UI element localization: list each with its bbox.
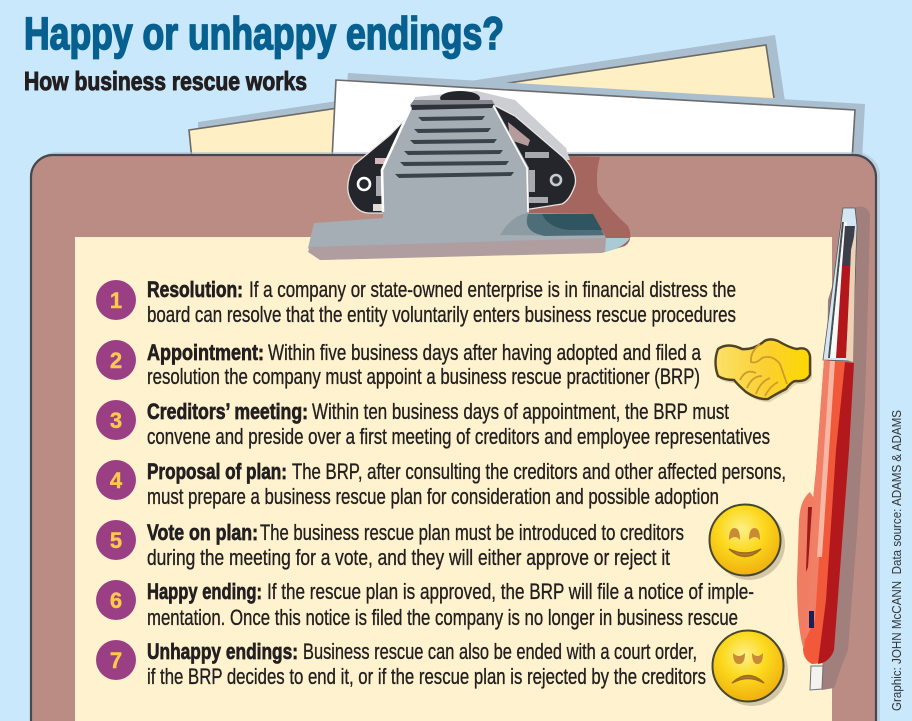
clip black ear left	[348, 112, 420, 213]
step 5	[96, 520, 684, 570]
clip front lip	[308, 238, 606, 260]
pen clip slot	[806, 507, 812, 572]
number badge 2	[96, 340, 136, 380]
icon: handshake	[716, 339, 812, 402]
number badge 7: 7	[110, 648, 122, 673]
number badge 6	[96, 580, 136, 620]
clip dark teal patch	[542, 214, 602, 230]
pen barrel dark side	[818, 362, 854, 664]
step 6 text: mentation. Once this notice is filed the company is no longer in business rescue	[147, 605, 738, 630]
pen tip dark line	[828, 222, 844, 358]
number badge 4	[96, 460, 136, 500]
credit line: Graphic: JOHN McCANN Data source: ADAMS & ADAMS	[889, 410, 904, 711]
number badge 2: 2	[110, 348, 122, 373]
step 6	[96, 579, 754, 630]
step 5 text: Vote on plan:	[147, 520, 258, 545]
pen barrel	[803, 360, 854, 664]
clip grey halo on sheet	[400, 91, 570, 160]
number badge 3	[96, 400, 136, 440]
paper clip	[308, 91, 630, 260]
step 5 text: The business rescue plan must be introduced to creditors	[260, 520, 684, 545]
step 1	[96, 277, 736, 327]
step 6 text: Happy ending:	[147, 579, 262, 604]
step 1 text: board can resolve that the entity voluntarily enters business rescue procedures	[147, 302, 736, 327]
clip top knob	[440, 91, 480, 105]
step 2 text	[147, 340, 702, 389]
step 2	[96, 340, 702, 389]
number badge 5: 5	[110, 528, 122, 553]
step 2 text: Appointment:	[147, 340, 264, 365]
cream paper on clipboard	[75, 237, 832, 721]
number badge 4: 4	[110, 468, 123, 493]
step 4 text	[147, 459, 786, 509]
pen tip red band	[836, 266, 851, 358]
pen tail end	[810, 666, 823, 690]
clip metal plate	[308, 100, 606, 260]
number badge 1	[96, 280, 136, 320]
step 2 text: Within five business days after having adopted and filed a	[268, 340, 702, 365]
number badge 1: 1	[110, 288, 122, 313]
clip plate right highlight	[493, 105, 528, 212]
step 4 text: must prepare a business rescue plan for consideration and possible adoption	[147, 484, 719, 509]
pen tip white stripe	[830, 222, 847, 358]
icon: smiling face	[710, 504, 785, 580]
step 1 text: Resolution:	[147, 277, 243, 302]
clip pivot right	[551, 175, 561, 185]
pen tip tan band	[846, 228, 856, 362]
clip black ear right	[480, 103, 576, 209]
number badge 3: 3	[110, 408, 122, 433]
step 7 text: if the BRP decides to end it, or if the rescue plan is rejected by the creditors	[147, 664, 706, 689]
step 4	[96, 459, 786, 509]
step 7 text: Business rescue can also be ended with a court order,	[303, 639, 697, 664]
step 7	[96, 639, 706, 689]
number badge 6: 6	[110, 588, 122, 613]
clip ridges	[395, 116, 514, 178]
yellow sheet behind clipboard	[189, 35, 786, 160]
pen barrel highlight	[817, 361, 835, 557]
pen chrome tip	[823, 208, 857, 361]
step 3 text: Creditors’ meeting:	[147, 399, 308, 424]
clip top dark bar	[411, 104, 494, 110]
pen shadow	[822, 207, 870, 690]
clip plate dark shadow patch	[527, 214, 604, 236]
pen button slot	[809, 611, 814, 628]
number badge 5	[96, 520, 136, 560]
step 1 text: If a company or state-owned enterprise is in financial distress the	[249, 277, 736, 302]
clip spring details	[373, 122, 549, 211]
pen	[797, 207, 870, 690]
step 7 text	[147, 639, 706, 689]
subtitle: How business rescue works	[24, 66, 307, 96]
step 6 text: If the rescue plan is approved, the BRP will file a notice of imple-	[267, 579, 754, 604]
step 3 text	[147, 399, 770, 449]
title: Happy or unhappy endings?	[24, 8, 504, 59]
clip top grey bar	[410, 100, 495, 105]
step 4 text: Proposal of plan:	[147, 459, 287, 484]
step 5 text	[147, 520, 684, 570]
pen tip dark band	[842, 226, 855, 266]
white sheet behind clipboard	[332, 73, 865, 160]
step 5 text: during the meeting for a vote, and they will either approve or reject it	[147, 545, 670, 570]
step 3	[96, 399, 770, 449]
step 7 text: Unhappy endings:	[147, 639, 298, 664]
clipboard board	[31, 152, 880, 721]
clip plate shadow patch	[500, 213, 604, 236]
clip shadow on paper	[604, 238, 630, 252]
step 1 text	[147, 277, 736, 327]
clip pivot left	[358, 178, 370, 190]
pen barrel pale stripe	[804, 360, 833, 640]
step 2 text: resolution the company must appoint a business rescue practitioner (BRP)	[147, 364, 700, 389]
clip plate highlight	[382, 107, 411, 212]
step 3 text: Within ten business days of appointment, the BRP must	[312, 399, 729, 424]
step 6 text	[147, 579, 754, 630]
clip shadow	[500, 156, 630, 252]
pen clip	[797, 492, 815, 650]
number badge 7	[96, 640, 136, 680]
icon: sad face	[712, 630, 788, 706]
